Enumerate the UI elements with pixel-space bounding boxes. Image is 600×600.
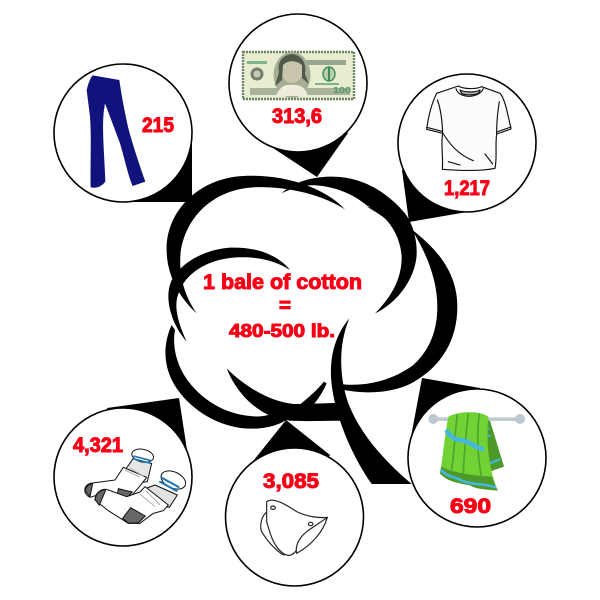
circle: socks <box>54 408 192 546</box>
value: 3,085: 3,085 <box>263 470 319 493</box>
icon: socks <box>85 447 188 523</box>
icon: jeans <box>87 75 145 188</box>
pointer: towel <box>408 378 480 458</box>
value: 215: 215 <box>142 114 174 137</box>
circle: diaper <box>226 448 364 586</box>
circle: money <box>229 14 367 152</box>
bubble: socks <box>54 398 192 546</box>
icon: towel <box>428 412 525 491</box>
pointer: jeans <box>123 128 192 202</box>
bubble: diaper <box>226 420 364 586</box>
value: 1,217: 1,217 <box>444 177 490 200</box>
bubble: money <box>229 14 367 177</box>
cotton boll outline <box>165 176 457 484</box>
circle: towel <box>408 389 546 527</box>
value: 4,321: 4,321 <box>73 434 123 457</box>
center text: bale of cotton: 480-500 lb. <box>229 321 335 341</box>
circle: jeans <box>54 64 192 202</box>
pointer: t-shirt <box>402 143 467 222</box>
center text: bale of cotton: = <box>279 295 291 317</box>
pointer: socks <box>107 398 187 477</box>
icon: diaper <box>261 500 327 555</box>
value: 690: 690 <box>450 495 491 518</box>
bubble: jeans <box>54 64 192 202</box>
circle: t-shirt <box>398 74 536 212</box>
icon: t-shirt <box>427 86 511 171</box>
bubble: towel <box>408 378 546 527</box>
bubble: t-shirt <box>398 74 536 222</box>
pointer: money <box>273 83 348 177</box>
bill denomination: 100 <box>333 86 352 95</box>
pointer: diaper <box>250 420 330 517</box>
value: 313,6: 313,6 <box>272 105 322 128</box>
center text: bale of cotton <box>203 271 362 341</box>
center text: bale of cotton: 1 bale of cotton <box>203 271 362 294</box>
icon: hundred dollar bill <box>242 51 355 100</box>
